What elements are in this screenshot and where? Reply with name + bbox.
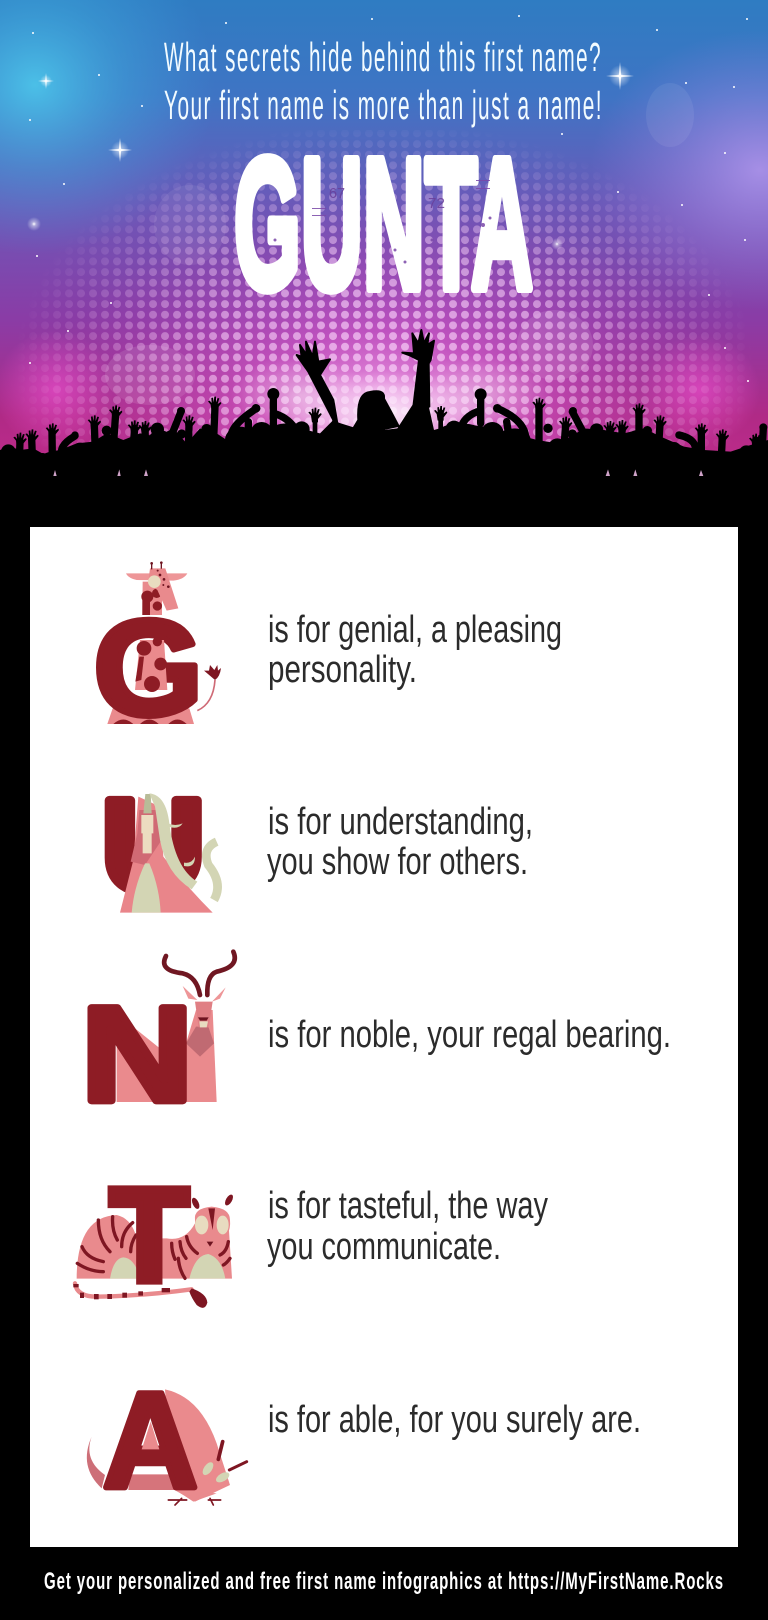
letter N gazelle bbox=[81, 952, 235, 1130]
white content panel bbox=[30, 527, 738, 1547]
letter G giraffe bbox=[93, 561, 221, 744]
name title bbox=[234, 121, 533, 328]
right crowd bbox=[384, 330, 768, 500]
description G bbox=[268, 609, 562, 691]
description U bbox=[267, 801, 533, 883]
name title: 67 bbox=[329, 185, 345, 202]
description G: is for genial, a pleasing bbox=[268, 609, 562, 651]
description A: is for able, for you surely are. bbox=[268, 1399, 641, 1441]
heading text bbox=[164, 34, 603, 128]
sparkle stars bbox=[27, 15, 749, 382]
description U: is for understanding, bbox=[268, 801, 533, 843]
N letterform: N bbox=[81, 979, 193, 1130]
left crowd bbox=[0, 342, 384, 500]
letter T tiger bbox=[73, 1162, 235, 1310]
G letterform: G bbox=[93, 592, 203, 744]
giraffe neck inside G bbox=[135, 637, 167, 692]
letter U unicorn bbox=[101, 772, 218, 921]
description T: is for tasteful, the way bbox=[268, 1185, 548, 1227]
crowd silhouette bbox=[0, 330, 768, 528]
description U: you show for others. bbox=[267, 841, 528, 883]
A letterform: A bbox=[103, 1363, 198, 1516]
description T: you communicate. bbox=[267, 1226, 501, 1268]
U letterform: U bbox=[101, 772, 206, 921]
letter A armadillo bbox=[87, 1363, 247, 1516]
description G: personality. bbox=[268, 649, 417, 691]
concert background panel bbox=[0, 0, 768, 454]
name title: 72 bbox=[428, 195, 445, 212]
description T bbox=[267, 1185, 548, 1268]
T letterform: T bbox=[110, 1162, 189, 1310]
